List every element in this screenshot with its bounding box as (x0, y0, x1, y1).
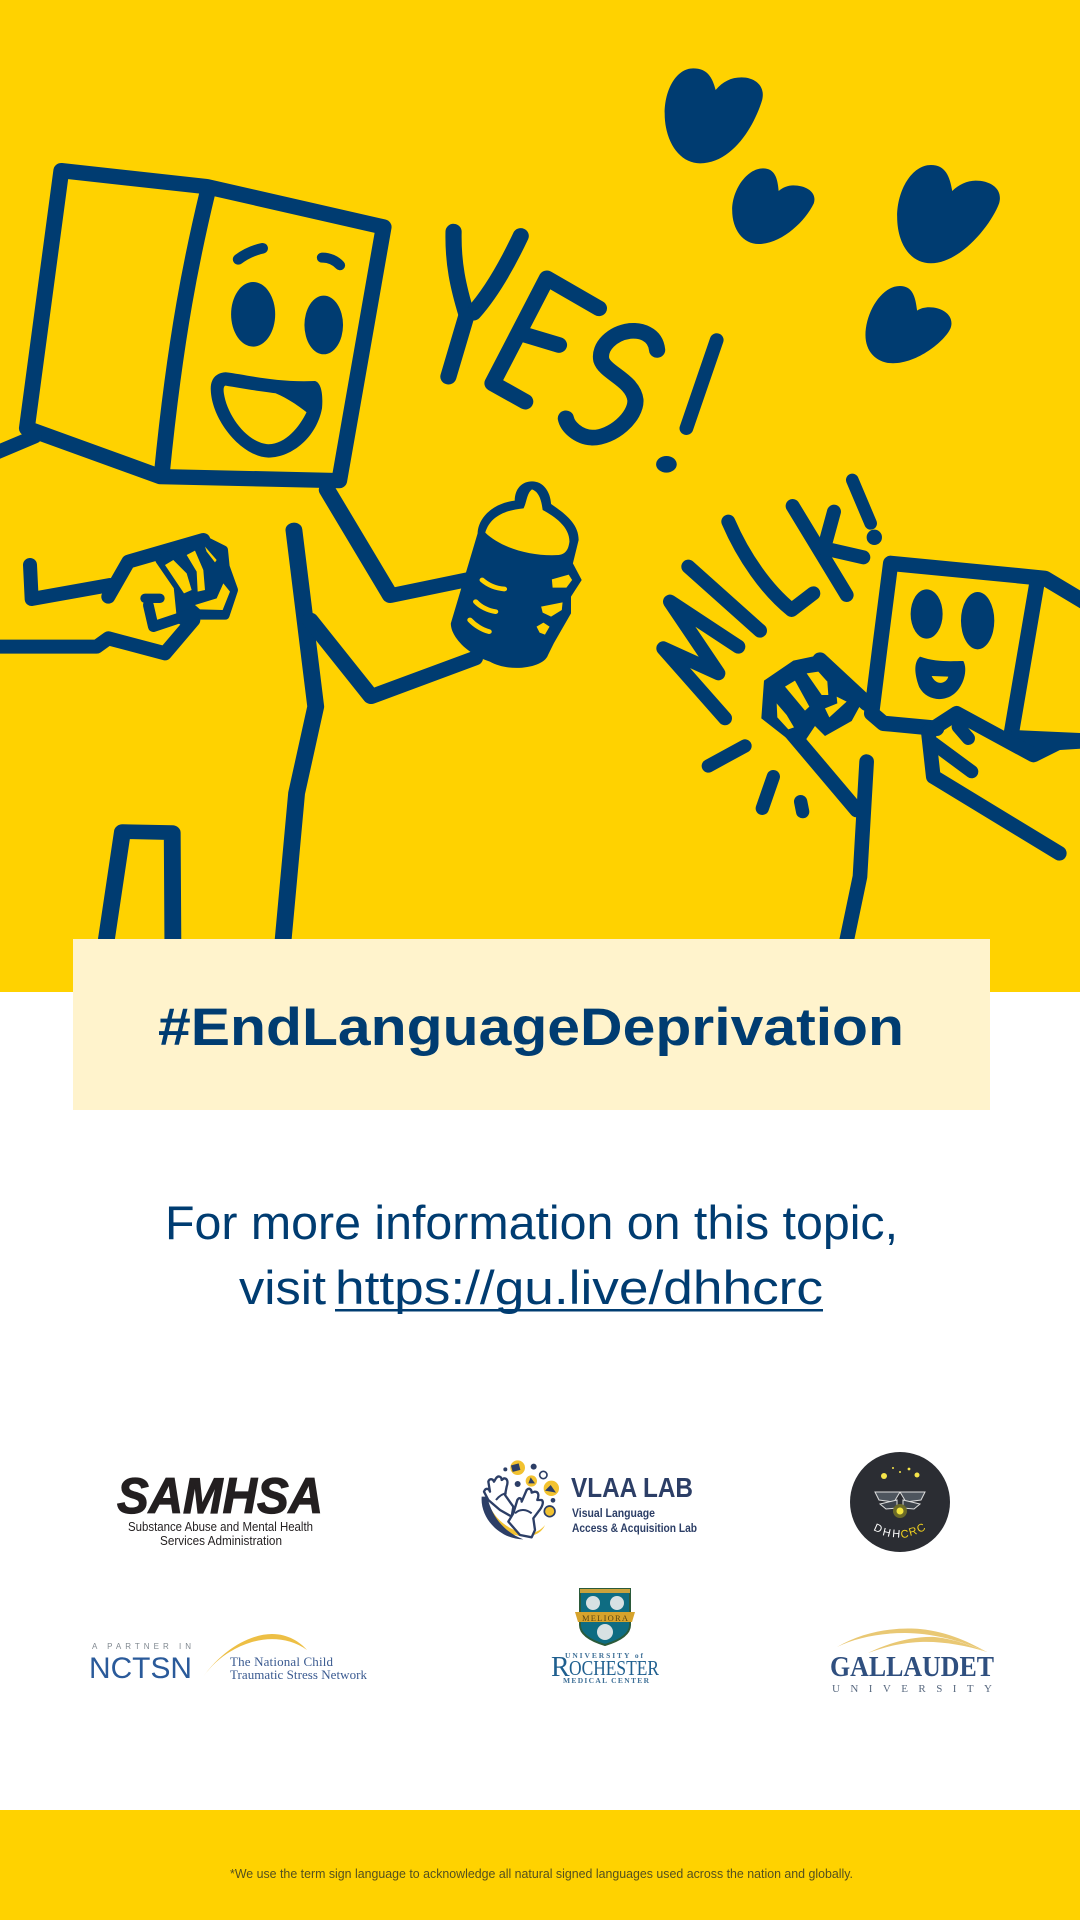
hashtag banner: #EndLanguageDeprivation (158, 998, 904, 1057)
more information text block: visit (239, 1261, 326, 1314)
motion lines around child fist (708, 746, 803, 812)
logo: Gallaudet University: GALLAUDET (830, 1651, 994, 1683)
hashtag banner (73, 939, 990, 1110)
logo: NCTSN: The National Child (230, 1654, 334, 1669)
logo: University of Rochester Medical Center: R (551, 1652, 570, 1683)
logo: University of Rochester Medical Center: MEDICAL CENTER (563, 1676, 650, 1685)
icon: baby bottle (451, 481, 582, 668)
more information text block: https://gu.live/dhhcrc (335, 1261, 823, 1314)
logo: NCTSN: Traumatic Stress Network (230, 1667, 368, 1682)
child body and raised arm (783, 723, 867, 953)
adult body, arm and leg (103, 490, 475, 960)
footnote: *We use the term sign language to acknowledge all natural signed languages used across the nation and globally. (230, 1867, 853, 1881)
yellow illustration background (0, 0, 1080, 992)
logo: VLAA Lab: Visual Language (572, 1508, 655, 1520)
icon: firefly (875, 1467, 925, 1518)
logo: DHHCRC: R (908, 1525, 919, 1539)
logo: Gallaudet University: UNIVERSITY (832, 1683, 992, 1695)
logo: SAMHSA: Services Administration (160, 1533, 282, 1548)
icon: child fist (761, 655, 867, 743)
logo: University of Rochester Medical Center: UNIVERSITY of (565, 1651, 644, 1660)
hearts (665, 68, 1000, 363)
icon: Rochester shield: MELIORA (582, 1613, 629, 1623)
logo: SAMHSA: Substance Abuse and Mental Health (128, 1519, 313, 1534)
child signing hand and arm (928, 713, 1080, 853)
logo: NCTSN: A PARTNER IN (92, 1642, 191, 1651)
logo: SAMHSA: SAMHSA (117, 1468, 323, 1524)
icon: VLAA hands (482, 1460, 559, 1539)
hand-drawn word: MILK! (663, 480, 882, 718)
more information text block (165, 1196, 898, 1314)
more information text block: For more information on this topic, (165, 1196, 898, 1249)
illustration: signing figures (0, 68, 1080, 960)
logo: DHHCRC: H (881, 1526, 892, 1540)
logo: VLAA Lab: VLAA LAB (571, 1472, 693, 1503)
logo: DHHCRC: H (892, 1528, 901, 1541)
child head and face (872, 563, 1080, 732)
logo: VLAA Lab: Access & Acquisition Lab (572, 1523, 697, 1535)
logo: DHHCRC: D (872, 1522, 884, 1536)
logo: Gallaudet University (830, 1628, 994, 1695)
adult head and face (0, 171, 384, 481)
footer band (0, 1810, 1080, 1920)
logo: DHHCRC (850, 1452, 950, 1552)
icon: adult fist signing (0, 540, 233, 653)
logo: NCTSN (89, 1634, 368, 1685)
logo: VLAA Lab (482, 1460, 697, 1539)
logo: University of Rochester Medical Center: OCHESTER (569, 1656, 659, 1680)
hand-drawn word: YES! (448, 232, 717, 473)
logo: DHHCRC: C (900, 1528, 909, 1541)
logo: DHHCRC: C (915, 1521, 928, 1536)
logo: NCTSN: NCTSN (89, 1652, 192, 1685)
logo: University of Rochester Medical Center (551, 1589, 659, 1685)
logo: SAMHSA (117, 1468, 323, 1548)
